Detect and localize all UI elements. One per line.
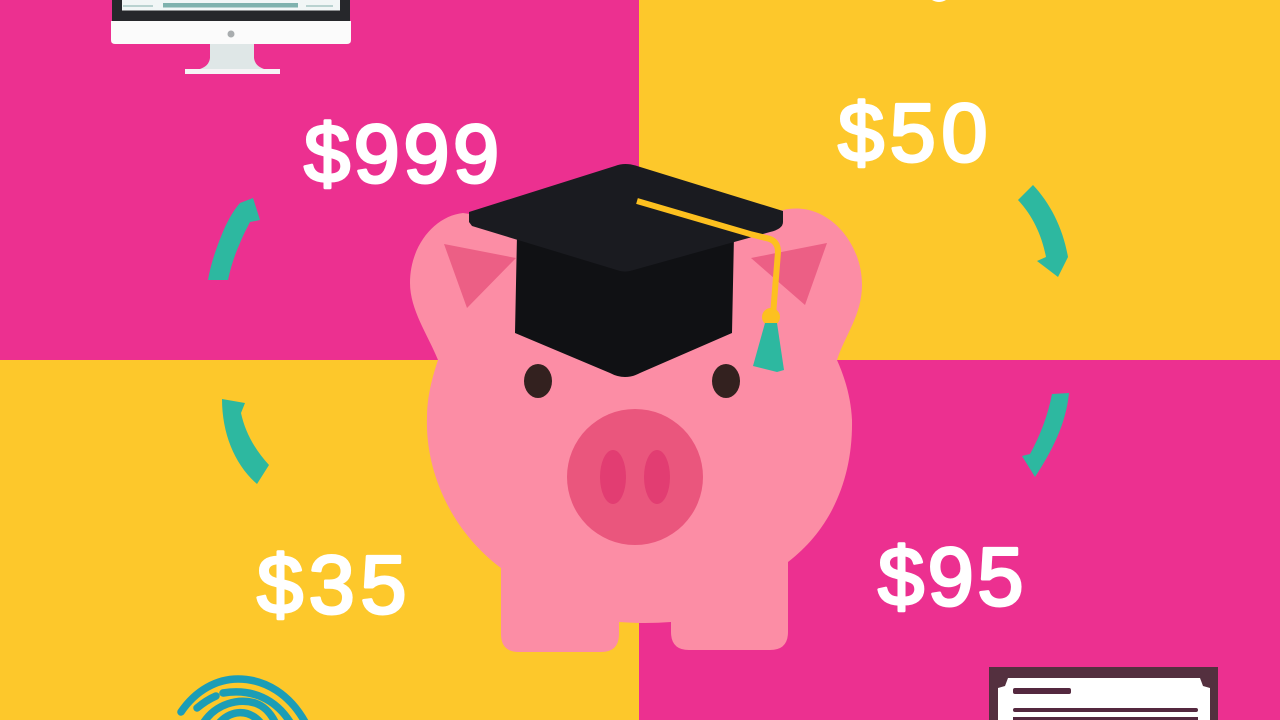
panel: top left pink (0, 0, 639, 360)
price: $35: $35 (257, 538, 412, 631)
small white glyph at top edge (932, 0, 946, 2)
panel: bottom left yellow (0, 360, 639, 720)
icon: desktop computer (111, 0, 351, 74)
right eye (712, 364, 740, 398)
left ear (444, 244, 516, 308)
price: $999: $999 (304, 107, 503, 200)
panel: top right yellow (639, 0, 1280, 360)
left eye (524, 364, 552, 398)
arrow: bottom right cycle (1022, 393, 1069, 477)
price: $50: $50 (838, 86, 993, 179)
pig body (410, 208, 862, 652)
cap board (469, 164, 783, 272)
left nostril (600, 450, 626, 504)
piggy bank (410, 208, 862, 652)
graduation cap (469, 164, 784, 377)
arrow: top left cycle (208, 198, 260, 280)
cord (637, 201, 778, 315)
price: $95: $95 (878, 530, 1027, 623)
right ear (751, 243, 827, 305)
right nostril (644, 450, 670, 504)
tassel (753, 323, 784, 372)
panel: bottom right pink (639, 360, 1280, 720)
icon: fingerprint (181, 679, 305, 720)
cap base (515, 235, 734, 377)
icon: document (989, 667, 1218, 720)
arrow: top right cycle (1018, 185, 1068, 277)
arrow: bottom left cycle (222, 399, 269, 484)
tassel knob (762, 308, 780, 326)
snout (567, 409, 703, 545)
